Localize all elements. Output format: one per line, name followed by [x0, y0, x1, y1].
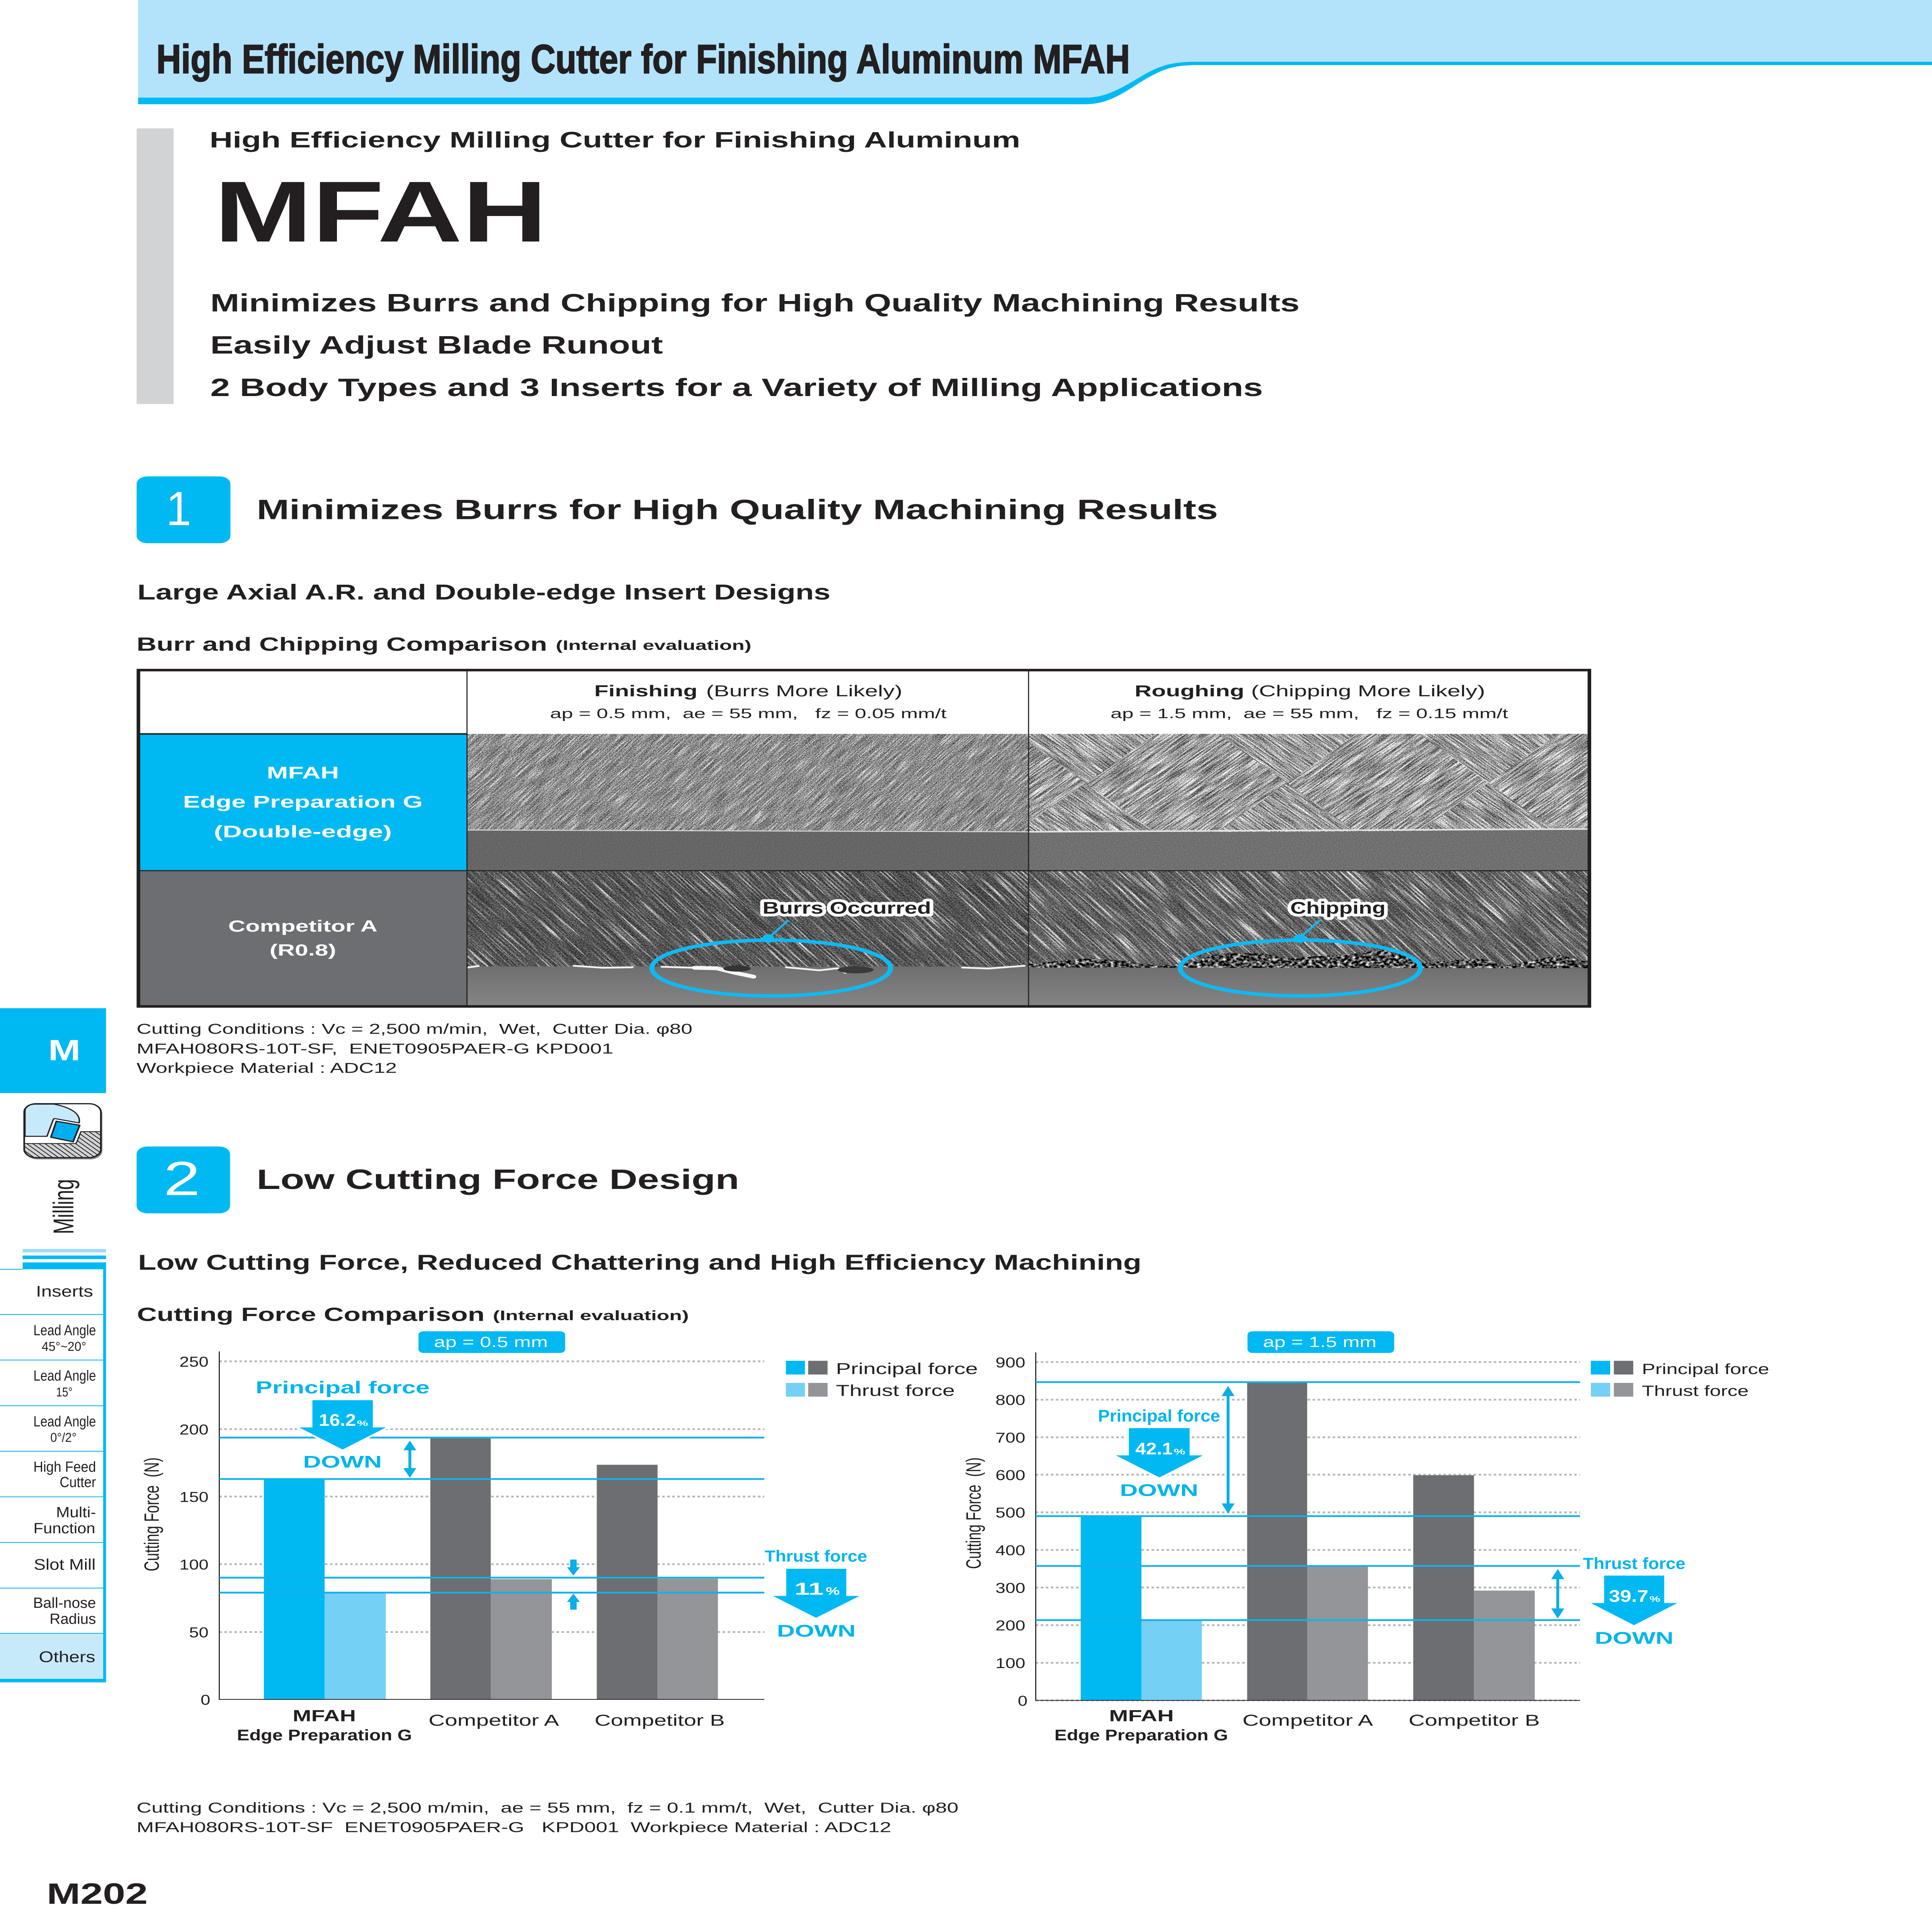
section 2 heading [137, 1146, 739, 1213]
principal difference arrow [403, 1440, 416, 1478]
y axis ticks [995, 1354, 1027, 1709]
sidebar M tab: M [48, 1034, 80, 1066]
thrust force callout [765, 1547, 867, 1640]
bars: competitor A [430, 1437, 552, 1699]
thrust force callout: Thrust force [765, 1547, 867, 1565]
sidebar navigation [0, 1008, 106, 1682]
bars: MFAH [1081, 1516, 1202, 1701]
row label: competitor: Competitor A [228, 917, 378, 935]
thrust difference arrows [567, 1560, 580, 1610]
comparison heading [137, 634, 752, 655]
column header: finishing: ap = 0.5 mm, ae = 55 mm, fz = 0.05 mm/t [550, 706, 947, 721]
y axis ticks: 0 [1018, 1693, 1027, 1709]
y axis ticks: 700 [995, 1430, 1026, 1446]
legend: Principal force [836, 1360, 978, 1378]
photo: MFAH finishing [468, 734, 1028, 870]
x axis labels: Edge Preparation G [1054, 1727, 1228, 1744]
section 2 subheading: Low Cutting Force, Reduced Chattering and High Efficiency Machining [138, 1251, 1141, 1274]
product name: MFAH [214, 163, 547, 260]
row label: MFAH [138, 735, 467, 871]
thrust force callout: Thrust force [1583, 1554, 1685, 1573]
callout: burrs occurred [652, 899, 931, 996]
y axis ticks [179, 1354, 210, 1708]
y axis ticks: 150 [179, 1489, 209, 1505]
nav: multi-function [34, 1504, 96, 1536]
thrust force callout: 11 [794, 1579, 824, 1599]
nav: high feed cutter [34, 1459, 96, 1490]
principal force callout: % [357, 1419, 368, 1428]
legend [786, 1360, 978, 1399]
nav: lead angle 15: 15° [56, 1385, 73, 1399]
x axis labels: Competitor A [429, 1711, 560, 1729]
nav: high feed cutter: High Feed [34, 1459, 96, 1475]
thrust force callout: % [826, 1585, 840, 1597]
header banner [138, 0, 1932, 104]
y axis ticks: 100 [179, 1556, 209, 1573]
y axis ticks: 300 [995, 1580, 1026, 1596]
bar chart: ap 1.5 mm [962, 1331, 1769, 1744]
bars: competitor B [1413, 1475, 1535, 1701]
y axis ticks: 500 [995, 1505, 1026, 1521]
chart footnote [137, 1799, 958, 1835]
x axis labels [1054, 1706, 1540, 1744]
nav: lead angle 0/2 [34, 1413, 96, 1445]
table footnote: Cutting Conditions : Vc = 2,500 m/min, Wet, Cutter Dia. φ80 [137, 1021, 692, 1037]
y axis ticks: 600 [995, 1467, 1026, 1483]
principal force callout [1097, 1406, 1222, 1500]
thrust difference arrow [1551, 1569, 1564, 1619]
nav: lead angle 0/2: 0°/2° [50, 1430, 77, 1445]
column header: roughing: (Chipping More Likely) [1251, 682, 1485, 700]
column header: finishing: Finishing [594, 682, 697, 700]
legend [1591, 1361, 1769, 1399]
chart badge: ap = 1.5 mm [1263, 1334, 1377, 1350]
photo: MFAH roughing [1029, 734, 1588, 870]
nav: ball-nose radius: Radius [49, 1611, 96, 1627]
section 2 heading: Low Cutting Force Design [257, 1164, 739, 1195]
thrust force callout: DOWN [1595, 1629, 1673, 1648]
chart badge: ap = 0.5 mm [434, 1334, 548, 1350]
table footnote [137, 1021, 692, 1076]
nav: ball-nose radius [33, 1595, 96, 1627]
force comparison heading: Cutting Force Comparison [137, 1304, 485, 1325]
comparison heading: (Internal evaluation) [556, 638, 752, 653]
nav: Inserts: Inserts [36, 1283, 93, 1300]
y axis ticks: 200 [179, 1422, 209, 1438]
thrust force callout [1583, 1554, 1685, 1648]
row label: MFAH: Edge Preparation G [183, 793, 423, 811]
principal force callout: % [1174, 1447, 1185, 1456]
nav: multi-function: Function [34, 1520, 95, 1536]
feature line 1: Minimizes Burrs and Chipping for High Quality Machining Results [210, 289, 1299, 317]
row label: MFAH: (Double-edge) [214, 823, 392, 841]
photo: competitor finishing [468, 871, 1028, 1005]
column header: roughing: ap = 1.5 mm, ae = 55 mm, fz = 0.15 mm/t [1111, 706, 1508, 721]
callout: chipping [1180, 899, 1420, 996]
section 1 heading [137, 476, 1218, 543]
chart badge [418, 1331, 565, 1353]
product subtitle: High Efficiency Milling Cutter for Finishing Aluminum [209, 128, 1020, 153]
column header: roughing: Roughing [1134, 682, 1244, 700]
principal force callout: 42.1 [1135, 1439, 1173, 1458]
icon: milling cutter insert [24, 1104, 102, 1159]
y axis ticks: 200 [995, 1617, 1026, 1634]
thrust force callout: 39.7 [1609, 1587, 1648, 1605]
column header: roughing [1111, 682, 1508, 721]
column header: finishing: (Burrs More Likely) [706, 682, 902, 700]
nav: high feed cutter: Cutter [60, 1474, 96, 1490]
x axis labels: Edge Preparation G [237, 1727, 412, 1744]
chart footnote: Cutting Conditions : Vc = 2,500 m/min, ae = 55 mm, fz = 0.1 mm/t, Wet, Cutter Dia. φ80 [137, 1799, 958, 1816]
thrust force callout: DOWN [777, 1622, 855, 1640]
page number: M202 [47, 1877, 148, 1910]
nav: lead angle 45-20: Lead Angle [34, 1322, 96, 1338]
table footnote: Workpiece Material : ADC12 [137, 1060, 397, 1076]
legend: Principal force [1642, 1361, 1769, 1377]
x axis labels [237, 1706, 725, 1744]
principal force callout: 16.2 [319, 1411, 356, 1430]
section 1 heading: Minimizes Burrs for High Quality Machining Results [257, 494, 1218, 525]
y axis ticks: 800 [995, 1392, 1026, 1408]
comparison heading: Burr and Chipping Comparison [137, 634, 547, 655]
row label: MFAH: MFAH [267, 764, 339, 782]
y axis ticks: 0 [201, 1692, 210, 1708]
chart badge [1248, 1331, 1394, 1353]
section 1 subheading: Large Axial A.R. and Double-edge Insert Designs [137, 580, 830, 604]
feature line 3: 2 Body Types and 3 Inserts for a Variety of Milling Applications [210, 374, 1263, 401]
principal force callout [256, 1378, 430, 1471]
nav: lead angle 15: Lead Angle [34, 1367, 96, 1384]
section 2 heading: 2 [163, 1152, 200, 1206]
x axis labels: Competitor B [1408, 1711, 1540, 1729]
callout: chipping: Chipping [1290, 899, 1386, 917]
force comparison heading: (Internal evaluation) [493, 1308, 689, 1323]
principal force callout: DOWN [303, 1453, 382, 1471]
x axis labels: MFAH [1109, 1706, 1174, 1725]
nav: lead angle 15 [34, 1367, 96, 1399]
x axis labels: Competitor A [1242, 1711, 1373, 1729]
nav: slot mill: Slot Mill [34, 1556, 95, 1573]
photo: competitor roughing [1029, 871, 1588, 1005]
y axis ticks: 400 [995, 1543, 1026, 1558]
bars: competitor B [597, 1465, 718, 1699]
force comparison heading [137, 1304, 689, 1325]
bar chart: ap 0.5 mm [140, 1331, 978, 1744]
sidebar label: Milling: Milling [48, 1179, 80, 1234]
chart footnote: MFAH080RS-10T-SF ENET0905PAER-G KPD001 Workpiece Material : ADC12 [137, 1819, 891, 1835]
sidebar M tab [0, 1008, 106, 1093]
x axis labels: Competitor B [595, 1711, 725, 1729]
burr comparison table [137, 668, 1591, 1008]
bars: MFAH [264, 1478, 386, 1699]
y axis label: Cutting Force (N) [962, 1458, 985, 1569]
principal force callout: Principal force [256, 1378, 430, 1397]
feature line 2: Easily Adjust Blade Runout [210, 331, 663, 359]
legend: Thrust force [836, 1382, 955, 1399]
nav: lead angle 0/2: Lead Angle [34, 1413, 96, 1430]
nav: lead angle 45-20 [34, 1322, 96, 1354]
y axis ticks: 250 [179, 1354, 209, 1370]
nav: others: Others [39, 1648, 95, 1665]
callout: burrs occurred: Burrs Occurred [762, 899, 931, 917]
principal force callout: DOWN [1120, 1481, 1198, 1500]
row label: competitor [138, 871, 467, 1007]
banner title: High Efficiency Milling Cutter for Finishing Aluminum MFAH [156, 36, 1130, 82]
thrust force callout: % [1650, 1595, 1660, 1604]
principal difference arrow [1222, 1386, 1235, 1514]
y axis ticks: 900 [995, 1354, 1026, 1371]
x axis labels: MFAH [293, 1706, 356, 1725]
y axis ticks: 100 [995, 1655, 1026, 1671]
y axis label: Cutting Force (N) [140, 1458, 163, 1571]
intro block [137, 128, 1299, 404]
row label: competitor: (R0.8) [270, 941, 336, 959]
nav: lead angle 45-20: 45°~20° [42, 1340, 86, 1354]
table footnote: MFAH080RS-10T-SF, ENET0905PAER-G KPD001 [137, 1041, 613, 1056]
nav: multi-function: Multi- [56, 1504, 96, 1520]
y axis ticks: 50 [189, 1624, 209, 1641]
nav: ball-nose radius: Ball-nose [33, 1595, 96, 1611]
bars: competitor A [1247, 1382, 1368, 1701]
column header: finishing [550, 682, 947, 721]
principal force callout: Principal force [1098, 1407, 1220, 1425]
legend: Thrust force [1642, 1383, 1748, 1399]
section 1 heading: 1 [166, 482, 191, 536]
